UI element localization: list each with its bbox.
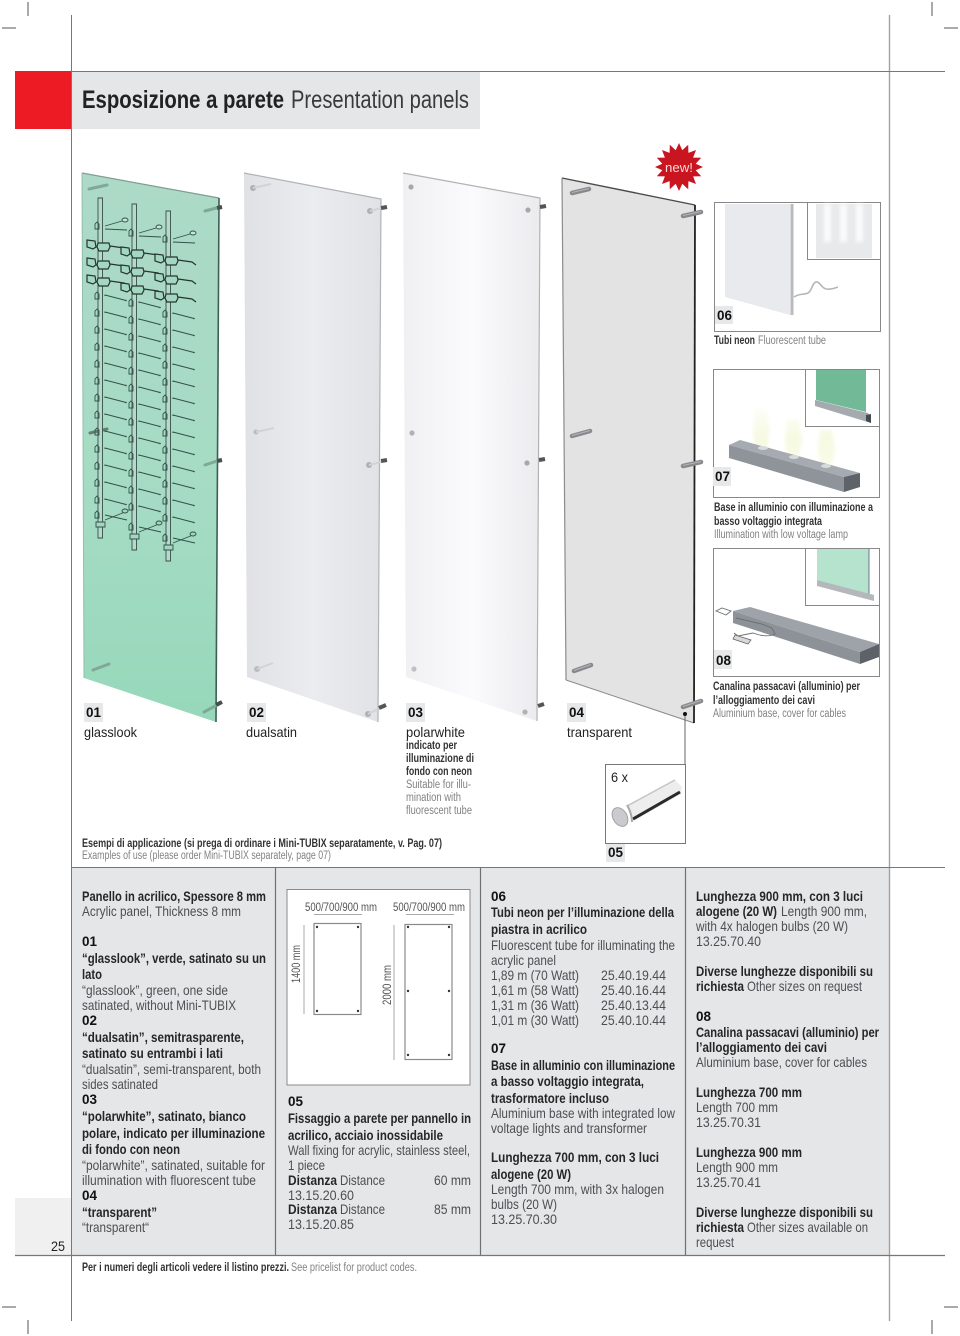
box 05: wall bolt detail — [606, 712, 687, 844]
box 05: wall bolt detail: 6 x — [611, 769, 628, 785]
caption 08: Aluminium base, cover for cables — [713, 708, 846, 720]
label 02 dualsatin: dualsatin — [246, 724, 297, 740]
label 04 transparent: 04 — [569, 704, 584, 720]
label 03 polarwhite: fondo con neon — [406, 766, 472, 778]
column 3: tube and lamp base specs: Lunghezza 700 mm, con 3 luci — [491, 1149, 659, 1165]
column 1: acrylic panel specs: Panello in acrilico, Spessore 8 mm — [82, 888, 266, 904]
column 4: lamp lengths and cable channel specs: alogene (20 W) — [696, 903, 777, 919]
label 01 glasslook: 01 — [86, 704, 101, 720]
caption 06: Fluorescent tube — [758, 335, 826, 347]
column 1: acrylic panel specs: satinato su entrambi i lati — [82, 1045, 223, 1061]
column 4: lamp lengths and cable channel specs: Aluminium base, cover for cables — [696, 1054, 867, 1070]
column 4: lamp lengths and cable channel specs: Length 900 mm — [696, 1159, 778, 1175]
column 1: acrylic panel specs: di fondo con neon — [82, 1141, 180, 1157]
caption 08: l’alloggiamento dei cavi — [713, 695, 815, 707]
column 1: acrylic panel specs: lato — [82, 966, 102, 982]
label 02 dualsatin — [246, 703, 297, 740]
title banner: Presentation panels — [291, 86, 469, 114]
column 2: wall fixing specs: 60 mm — [434, 1172, 471, 1188]
column 4: lamp lengths and cable channel specs: Diverse lunghezze disponibili su — [696, 1204, 873, 1220]
column 2: wall fixing specs: Distance — [340, 1172, 385, 1188]
panel 02: dualsatin — [244, 173, 387, 722]
column 1: acrylic panel specs: 01 — [82, 933, 97, 949]
column 4: lamp lengths and cable channel specs: Lunghezza 700 mm — [696, 1084, 802, 1100]
column 4: lamp lengths and cable channel specs: with 4x halogen bulbs (20 W) — [695, 918, 848, 934]
column 4: lamp lengths and cable channel specs: request — [696, 1234, 734, 1250]
column 4: lamp lengths and cable channel specs: Length 700 mm — [696, 1099, 778, 1115]
column 4: lamp lengths and cable channel specs: richiesta — [696, 1219, 744, 1235]
column 2: wall fixing specs: Fissaggio a parete per pannello in — [288, 1110, 471, 1126]
column 3: tube and lamp base specs: alogene (20 W) — [491, 1166, 571, 1182]
panel 03: polarwhite — [403, 173, 546, 721]
dimension diagram: 2000 mm — [382, 965, 394, 1005]
page number: 25 — [51, 1238, 65, 1254]
column 3: tube and lamp base specs: Base in alluminio con illuminazione — [491, 1057, 675, 1073]
column 4: lamp lengths and cable channel specs: 13.25.70.40 — [696, 933, 761, 949]
footer note: Per i numeri degli articoli vedere il listino prezzi. — [82, 1262, 289, 1274]
column 4: lamp lengths and cable channel specs: 13.25.70.31 — [696, 1114, 761, 1130]
column 4: lamp lengths and cable channel specs: Lunghezza 900 mm — [696, 1144, 802, 1160]
column 2: wall fixing specs: 05 — [288, 1093, 303, 1109]
detail 08: cable channel image — [714, 548, 880, 676]
column 1: acrylic panel specs: 04 — [82, 1187, 97, 1203]
column 1: acrylic panel specs: “transparent” — [82, 1204, 157, 1220]
column 3: tube and lamp base specs: 25.40.16.44 — [601, 982, 666, 998]
label 03 polarwhite: 03 — [408, 704, 423, 720]
caption 08 — [713, 681, 860, 720]
column 4: lamp lengths and cable channel specs — [695, 888, 879, 1250]
examples caption: Examples of use (please order Mini-TUBIX separately, page 07) — [82, 850, 331, 862]
detail 07: illuminated aluminium base image: 07 — [715, 468, 730, 484]
new badge: new! — [665, 160, 693, 175]
column 3: tube and lamp base specs: 25.40.19.44 — [601, 967, 666, 983]
title banner — [15, 71, 480, 129]
column 2: wall fixing specs: acrilico, acciaio inossidabile — [288, 1127, 443, 1143]
column 2: wall fixing specs: 13.15.20.85 — [288, 1216, 354, 1232]
column 1: acrylic panel specs: 03 — [82, 1091, 97, 1107]
column 4: lamp lengths and cable channel specs: Length 900 mm, — [781, 903, 867, 919]
column 3: tube and lamp base specs: 1,31 m (36 Watt) — [491, 997, 579, 1013]
column 1: acrylic panel specs: Acrylic panel, Thickness 8 mm — [82, 903, 241, 919]
dimension diagram: 500/700/900 mm — [393, 902, 465, 914]
label 03 polarwhite — [406, 703, 474, 817]
column 1: acrylic panel specs: “polarwhite”, satinato, bianco — [82, 1108, 246, 1124]
inset: green panel on channel — [806, 548, 880, 606]
column 3: tube and lamp base specs: Tubi neon per l’illuminazione della — [491, 904, 674, 920]
footer note: See pricelist for product codes. — [291, 1262, 417, 1274]
column 3: tube and lamp base specs: Length 700 mm, with 3x halogen — [491, 1181, 664, 1197]
column 2: wall fixing specs: Distanza — [288, 1201, 337, 1217]
column 2: wall fixing specs — [288, 1093, 471, 1232]
dimension diagram: 500/700/900 mm — [305, 902, 377, 914]
column 2: wall fixing specs: 1 piece — [288, 1157, 325, 1173]
column 4: lamp lengths and cable channel specs: richiesta — [696, 978, 744, 994]
caption 08: Canalina passacavi (alluminio) per — [713, 681, 860, 693]
column 3: tube and lamp base specs: 25.40.13.44 — [601, 997, 666, 1013]
label 03 polarwhite: fluorescent tube — [406, 805, 472, 817]
examples caption — [82, 838, 442, 862]
title banner: Esposizione a parete — [82, 86, 284, 114]
column 1: acrylic panel specs — [82, 888, 266, 1235]
detail 06: fluorescent tube image: 06 — [717, 307, 732, 323]
column 1: acrylic panel specs: satinated, without Mini-TUBIX — [82, 997, 237, 1013]
column 1: acrylic panel specs: 02 — [82, 1012, 97, 1028]
dimension diagram: 1400 mm — [291, 945, 303, 983]
panel 01: glasslook with racks — [82, 173, 222, 722]
column 3: tube and lamp base specs: 1,89 m (70 Watt) — [491, 967, 579, 983]
inset: lit panel — [808, 202, 880, 260]
column 3: tube and lamp base specs: acrylic panel — [491, 952, 556, 968]
label 01 glasslook — [84, 703, 138, 740]
panel 04: transparent — [562, 178, 701, 723]
column 3: tube and lamp base specs — [491, 888, 676, 1227]
column 3: tube and lamp base specs: 1,61 m (58 Watt) — [491, 982, 579, 998]
column 2: wall fixing specs: 85 mm — [434, 1201, 471, 1217]
column 4: lamp lengths and cable channel specs: Lunghezza 900 mm, con 3 luci — [696, 888, 863, 904]
detail 07: illuminated aluminium base image — [713, 370, 880, 498]
column 1: acrylic panel specs: “polarwhite”, satinated, suitable for — [82, 1157, 265, 1173]
new badge — [655, 143, 703, 191]
column 3: tube and lamp base specs: Fluorescent tube for illuminating the — [491, 937, 675, 953]
caption 07: Base in alluminio con illuminazione a — [714, 502, 873, 514]
column 3: tube and lamp base specs: trasformatore incluso — [491, 1090, 609, 1106]
column 3: tube and lamp base specs: 25.40.10.44 — [601, 1012, 666, 1028]
column 3: tube and lamp base specs: 06 — [491, 888, 506, 904]
column 1: acrylic panel specs: polare, indicato per illuminazione — [82, 1125, 265, 1141]
column 4: lamp lengths and cable channel specs: Other sizes available on — [747, 1219, 868, 1235]
label 02 dualsatin: 02 — [249, 704, 264, 720]
column 2: wall fixing specs: 13.15.20.60 — [288, 1187, 354, 1203]
caption 07: basso voltaggio integrata — [714, 516, 822, 528]
caption 07: Illumination with low voltage lamp — [714, 529, 848, 541]
label 03 polarwhite: Suitable for illu- — [406, 779, 471, 791]
column 3: tube and lamp base specs: piastra in acrilico — [491, 921, 587, 937]
spec table background — [15, 868, 889, 1255]
column 1: acrylic panel specs: “dualsatin”, semi-transparent, both — [82, 1061, 261, 1077]
column 1: acrylic panel specs: sides satinated — [82, 1076, 158, 1092]
column 2: wall fixing specs: Distanza — [288, 1172, 337, 1188]
caption 06 — [714, 335, 826, 347]
column 1: acrylic panel specs: “glasslook”, green, one side — [82, 982, 228, 998]
caption 06: Tubi neon — [714, 335, 755, 347]
column 3: tube and lamp base specs: 07 — [491, 1040, 506, 1056]
column 3: tube and lamp base specs: voltage lights and transformer — [491, 1120, 647, 1136]
column 1: acrylic panel specs: “glasslook”, verde, satinato su un — [82, 950, 266, 966]
column 3: tube and lamp base specs: 13.25.70.30 — [491, 1211, 557, 1227]
label 01 glasslook: glasslook — [84, 724, 138, 740]
column 1: acrylic panel specs: “transparent“ — [82, 1219, 149, 1235]
examples caption: Esempi di applicazione (si prega di ordinare i Mini-TUBIX separatamente, v. Pag. 07) — [82, 838, 442, 850]
eyewear rack rods — [87, 198, 196, 561]
column 2: wall fixing specs: Distance — [340, 1201, 385, 1217]
column 3: tube and lamp base specs: 1,01 m (30 Watt) — [491, 1012, 579, 1028]
column 1: acrylic panel specs: illumination with fluorescent tube — [82, 1172, 256, 1188]
column 3: tube and lamp base specs: bulbs (20 W) — [491, 1196, 557, 1212]
label 03 polarwhite: indicato per — [406, 740, 457, 752]
column 2: wall fixing specs: Wall fixing for acrylic, stainless steel, — [288, 1142, 470, 1158]
column 4: lamp lengths and cable channel specs: Other sizes on request — [747, 978, 862, 994]
column 4: lamp lengths and cable channel specs: l’alloggiamento dei cavi — [696, 1039, 827, 1055]
label 03 polarwhite: mination with — [406, 792, 461, 804]
detail 06: fluorescent tube image — [714, 202, 880, 332]
column 3: tube and lamp base specs: a basso voltaggio integrata, — [491, 1073, 644, 1089]
column 4: lamp lengths and cable channel specs: Canalina passacavi (alluminio) per — [696, 1024, 879, 1040]
caption 07 — [714, 502, 873, 541]
column 4: lamp lengths and cable channel specs: 08 — [696, 1008, 711, 1024]
column 4: lamp lengths and cable channel specs: 13.25.70.41 — [696, 1174, 761, 1190]
label 04 transparent — [567, 703, 632, 740]
dimension diagram — [287, 890, 470, 1085]
label 03 polarwhite: polarwhite — [406, 724, 465, 740]
label 05: 05 — [608, 844, 623, 860]
label 04 transparent: transparent — [567, 724, 632, 740]
detail 08: cable channel image: 08 — [716, 652, 731, 668]
label 03 polarwhite: illuminazione di — [406, 753, 474, 765]
inset: green panel on base — [806, 370, 880, 426]
column 4: lamp lengths and cable channel specs: Diverse lunghezze disponibili su — [696, 963, 873, 979]
column 3: tube and lamp base specs: Aluminium base with integrated low — [491, 1105, 676, 1121]
column 1: acrylic panel specs: “dualsatin”, semitrasparente, — [82, 1029, 244, 1045]
